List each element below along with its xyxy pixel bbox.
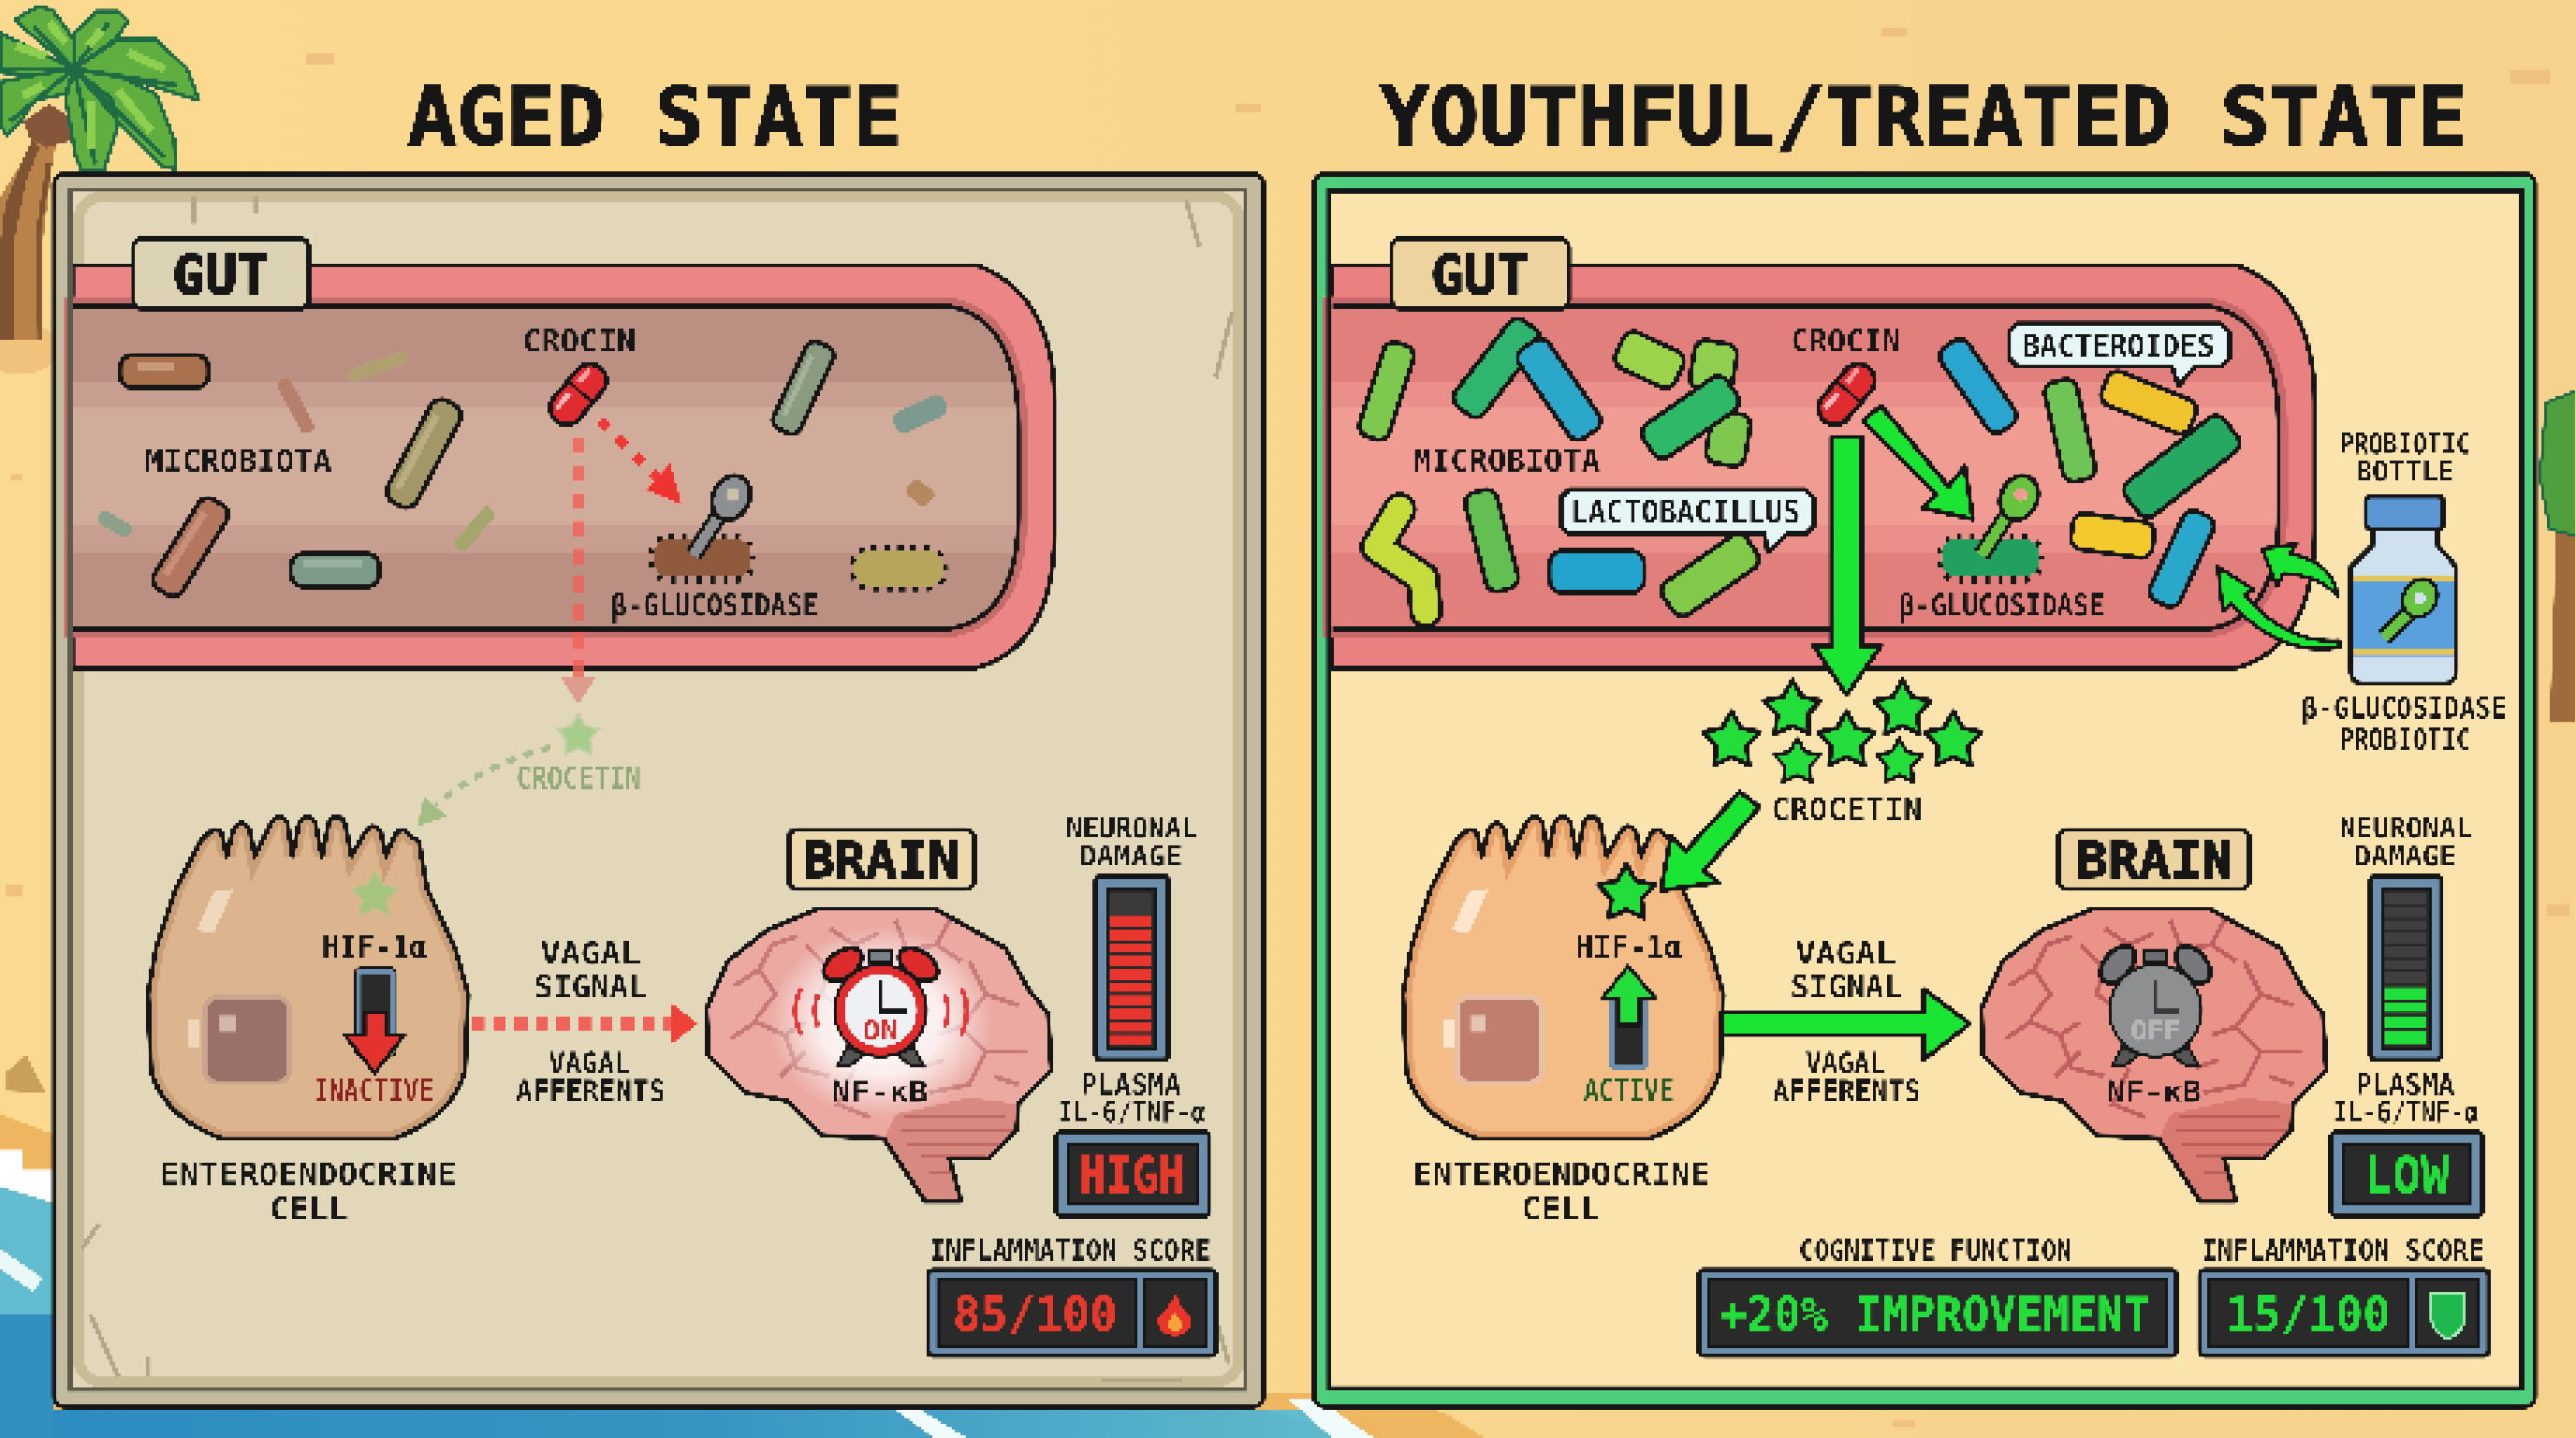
icon: flame	[1158, 1293, 1191, 1336]
readout: inflammation score 15: 15/100	[2226, 1288, 2391, 1343]
label: inflammation score: INFLAMMATION SCORE	[929, 1235, 1211, 1268]
label: cognitive function: COGNITIVE FUNCTION	[1799, 1235, 2071, 1268]
label: vagal signal	[1791, 935, 1902, 1005]
readout: cognitive improvement: +20% IMPROVEMENT	[1720, 1288, 2150, 1343]
readout: low: LOW	[2364, 1146, 2450, 1205]
label: brain: BRAIN	[803, 832, 959, 889]
label: NF-kB: NF-κB	[831, 1074, 929, 1110]
label: neuronal damage: NEURONAL	[2339, 813, 2472, 845]
nucleus	[205, 997, 289, 1083]
label: plasma il-6/tnf-a: PLASMA	[2356, 1069, 2454, 1102]
label: enteroendocrine cell	[1412, 1155, 1710, 1226]
icon: probiotic bottle	[2351, 496, 2456, 683]
gut tube	[72, 265, 1055, 668]
label: gut	[133, 238, 309, 309]
label: HIF-1 alpha: HIF-1α	[1575, 929, 1682, 965]
label: plasma il-6/tnf-a: PLASMA	[1081, 1069, 1181, 1102]
gauge arrow up	[1602, 966, 1656, 1068]
label: HIF-1 alpha: HIF-1α	[322, 929, 427, 965]
background: ocean and shore	[0, 1114, 1486, 1438]
icon: active alarm clock	[795, 942, 967, 1064]
label: enteroendocrine cell: CELL	[270, 1190, 348, 1226]
label: crocetin: CROCETIN	[1771, 791, 1922, 828]
nucleus highlight	[220, 1016, 235, 1032]
icon: crocetin star in cell	[1599, 864, 1655, 917]
label: vagal signal: SIGNAL	[1791, 968, 1902, 1005]
label: probiotic bottle	[2339, 428, 2471, 489]
healthy microbiota	[1356, 315, 2244, 621]
arrow: crocin down to crocetin	[1814, 437, 1881, 695]
label: beta-glucosidase probiotic	[2302, 692, 2507, 756]
label: beta-glucosidase probiotic: PROBIOTIC	[2339, 723, 2471, 756]
callout: bacteroides: BACTEROIDES	[2023, 328, 2215, 364]
label: enteroendocrine cell: CELL	[1521, 1190, 1600, 1226]
palm tree right	[2539, 391, 2576, 723]
label: plasma il-6/tnf-a	[2333, 1069, 2479, 1130]
label: plasma il-6/tnf-a	[1058, 1069, 1206, 1130]
faded microbiota	[95, 338, 950, 600]
arrow: weak dashed vagal signal	[472, 1003, 698, 1045]
label: active: ACTIVE	[1584, 1072, 1674, 1108]
label: enteroendocrine cell	[159, 1155, 457, 1226]
label: gut: GUT	[1431, 243, 1530, 307]
icons: crocetin stars	[1704, 681, 1982, 782]
arrows: probiotic into gut	[2217, 544, 2339, 649]
label: vagal signal: VAGAL	[540, 935, 640, 972]
parchment background	[54, 174, 1264, 1406]
arrow: faded curve to cell	[417, 748, 550, 827]
gauge: neuronal damage high	[1096, 875, 1168, 1060]
enteroendocrine cell	[148, 816, 468, 1138]
palm tree left	[0, 7, 198, 374]
gauge arrow down	[345, 968, 404, 1073]
label: beta-glucosidase: β-GLUCOSIDASE	[1899, 587, 2104, 624]
crocetin star in cell	[352, 872, 397, 915]
icon: inactive alarm clock	[2094, 940, 2217, 1064]
panel: youthful/treated state	[1314, 174, 2535, 1406]
brain: inflamed	[707, 909, 1051, 1201]
arrow: weak path to beta-glucosidase	[600, 420, 681, 505]
label: vagal afferents: VAGAL	[549, 1047, 631, 1080]
label: neuronal damage	[2339, 813, 2472, 873]
arrow: weak path to crocetin	[560, 437, 596, 705]
panel frame overlay	[1329, 191, 2522, 1388]
label: probiotic bottle: PROBIOTIC	[2339, 428, 2471, 461]
arrow: crocin to beta-glucosidase	[1863, 406, 1973, 520]
icon: key on enzyme	[654, 469, 757, 579]
nucleus	[1457, 997, 1541, 1083]
label: crocetin faded: CROCETIN	[516, 759, 640, 796]
label: brain: BRAIN	[2076, 832, 2232, 889]
gut tube	[1332, 265, 2315, 668]
label: inactive: INACTIVE	[314, 1072, 433, 1108]
callout: lactobacillus	[1560, 490, 1814, 552]
icon: faded crocetin star	[556, 713, 600, 755]
nucleus highlight	[1471, 1016, 1486, 1032]
readout: low	[2331, 1132, 2482, 1216]
label: neuronal damage: DAMAGE	[1079, 841, 1183, 873]
gauge: neuronal damage low	[2371, 875, 2441, 1060]
readout: cognitive improvement	[1699, 1270, 2177, 1356]
title: aged state: AGED STATE	[407, 70, 902, 164]
icon: shield	[2432, 1293, 2465, 1339]
brain: calm	[1982, 909, 2326, 1201]
label: gut: GUT	[172, 243, 270, 307]
label: vagal afferents: AFFERENTS	[1773, 1075, 1921, 1108]
label: probiotic bottle: BOTTLE	[2356, 456, 2454, 489]
label: vagal afferents	[1773, 1047, 1921, 1108]
enteroendocrine cell	[1403, 816, 1723, 1138]
icon: crocin pill	[1812, 358, 1881, 432]
label: beta-glucosidase: β-GLUCOSIDASE	[611, 587, 818, 624]
arrow: strong vagal signal	[1721, 990, 1969, 1060]
label: enteroendocrine cell: ENTEROENDOCRINE	[159, 1155, 457, 1192]
panel frame overlay	[70, 190, 1245, 1389]
readout: high	[1057, 1132, 1209, 1216]
label: vagal signal	[534, 935, 648, 1005]
label: inflammation score: INFLAMMATION SCORE	[2202, 1235, 2484, 1268]
icon: key on enzyme	[1942, 469, 2045, 579]
label: neuronal damage: NEURONAL	[1066, 813, 1197, 845]
readout: high: HIGH	[1079, 1146, 1184, 1205]
readout: inflammation score 15	[2200, 1270, 2489, 1356]
label: enteroendocrine cell: ENTEROENDOCRINE	[1412, 1155, 1710, 1192]
label: beta-glucosidase probiotic: β-GLUCOSIDASE	[2302, 692, 2507, 726]
readout: inflammation score 85: 85/100	[953, 1288, 1117, 1343]
arrow: crocetin to cell	[1661, 792, 1760, 890]
label: neuronal damage: DAMAGE	[2354, 841, 2456, 873]
label: vagal afferents: AFFERENTS	[516, 1075, 666, 1108]
panel background	[1314, 174, 2535, 1406]
label: gut	[1392, 238, 1569, 309]
callout: bacteroides	[2009, 324, 2230, 386]
inflammatory glow	[768, 927, 992, 1117]
callout: lactobacillus: LACTOBACILLUS	[1571, 493, 1801, 530]
panel: aged state	[54, 174, 1264, 1406]
label: crocin: CROCIN	[522, 323, 636, 360]
label: NF-kB: NF-κB	[2106, 1074, 2202, 1110]
title: youthful/treated state: YOUTHFUL/TREATED STATE	[1380, 70, 2467, 164]
icon: crocin pill	[544, 358, 613, 432]
label: neuronal damage	[1066, 813, 1197, 873]
label: plasma il-6/tnf-a: IL-6/TNF-α	[1058, 1097, 1206, 1130]
label: vagal afferents: VAGAL	[1806, 1047, 1886, 1080]
label: crocin: CROCIN	[1791, 323, 1901, 360]
readout: inflammation score 85	[929, 1270, 1216, 1356]
label: vagal signal: VAGAL	[1795, 935, 1895, 972]
label: microbiota: MICROBIOTA	[144, 443, 332, 479]
clock state: off: OFF	[2130, 1016, 2180, 1047]
clock state: on: ON	[862, 1016, 899, 1047]
label: microbiota: MICROBIOTA	[1412, 443, 1600, 479]
label: plasma il-6/tnf-a: IL-6/TNF-α	[2333, 1097, 2479, 1130]
label: vagal afferents	[516, 1047, 666, 1108]
label: vagal signal: SIGNAL	[534, 968, 648, 1005]
